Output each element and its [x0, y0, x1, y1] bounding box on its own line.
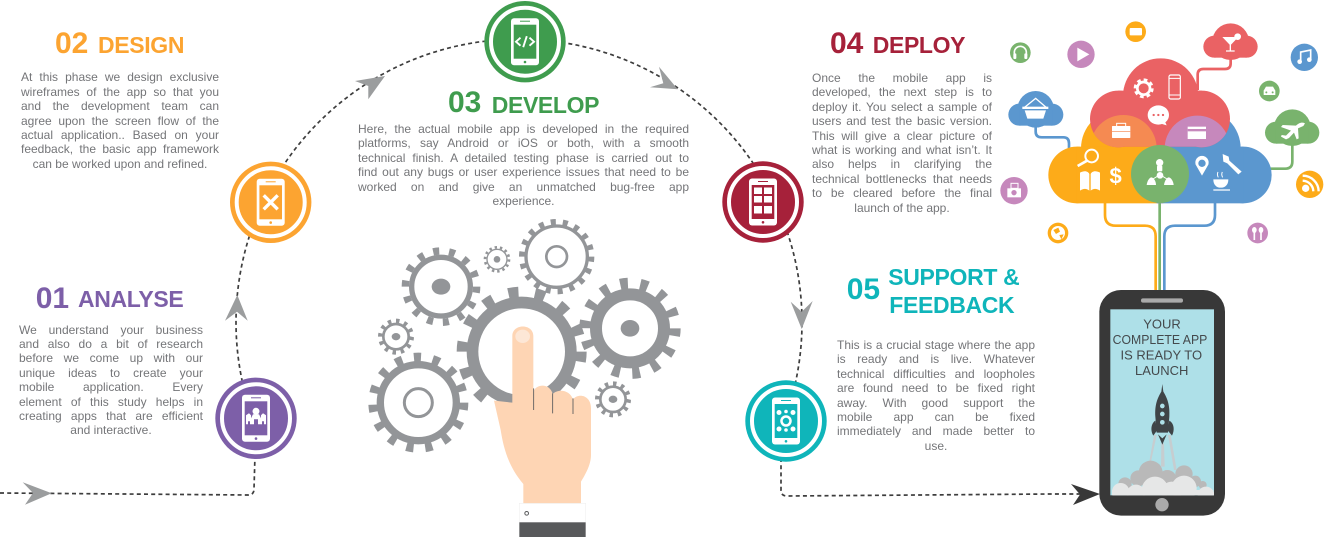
text: develop description: technical finish. A detailed testing phase is carried out to: [358, 151, 689, 165]
text: analyse description: element of this study helps in: [19, 395, 203, 409]
text: design description: At this phase we design exclusive: [21, 70, 219, 84]
icon: support badge: [745, 380, 827, 462]
icon: cutlery: [1247, 223, 1268, 243]
text: develop description: experience.: [492, 194, 555, 208]
launch phone: [1099, 290, 1225, 516]
icon: rss: [1296, 171, 1323, 198]
panel: step 05 support and feedback: FEEDBACK: [889, 292, 1014, 318]
text: develop description: platforms, say Android or iOS or both, with a smooth: [358, 136, 689, 150]
text: design description: [21, 70, 219, 171]
cloud network illustration: [1000, 21, 1323, 291]
panel: step 04 deploy: [812, 27, 992, 215]
icon: airplane cloud: [1265, 109, 1319, 146]
green centre: [1131, 145, 1189, 203]
screen caption: YOUR: [1143, 316, 1181, 331]
icon: analyse badge: [215, 378, 297, 459]
text: deploy description: technical bottlenecks that needs: [812, 172, 992, 186]
text: support description: are found need to be fixed right: [837, 381, 1035, 395]
gear: top: [522, 222, 591, 291]
smoke: [1112, 460, 1214, 496]
text: analyse description: and interactive.: [70, 423, 152, 437]
icon: develop badge: [484, 1, 566, 82]
icon: cocktail cloud: [1203, 23, 1258, 60]
panel: step 05 support and feedback: 05: [847, 273, 880, 306]
screen caption: IS READY TO: [1121, 347, 1202, 362]
gear: top left: [405, 251, 477, 322]
rocket: [1149, 384, 1177, 470]
panel: step 03 develop: [358, 86, 689, 208]
gear: small top: [485, 247, 509, 271]
text: design description: actual application.. Based on your: [21, 128, 219, 142]
panel: step 01 analyse: 01: [36, 282, 69, 315]
text: analyse description: [19, 323, 203, 437]
text: analyse description: creating apps that are efficient: [19, 409, 203, 423]
phone screen: [1110, 309, 1214, 495]
panel: step 02 design: [21, 27, 219, 171]
gear: right: [585, 284, 675, 373]
text: design description: agree upon the screen flow of the: [21, 114, 219, 128]
panel: step 05 support and feedback: SUPPORT &: [888, 264, 1019, 290]
text: deploy description: Once the mobile app is: [812, 71, 992, 85]
gear: centre: [462, 292, 581, 411]
text: deploy description: users and test the basic version.: [812, 114, 992, 128]
text: support description: mobile app can be fixed: [837, 410, 1035, 424]
hand: [494, 326, 591, 537]
text: analyse description: before we come up with our: [19, 351, 203, 365]
text: deploy description: developed, the next step is to: [812, 85, 992, 99]
text: design description: wireframes of the app so that you: [21, 85, 219, 99]
text: support description: This is a crucial stage where the app: [837, 338, 1035, 352]
text: deploy description: [812, 71, 992, 215]
panel: step 05 support and feedback: [837, 264, 1035, 453]
panel: step 04 deploy: 04: [830, 27, 863, 60]
icon: globe: [1048, 223, 1068, 243]
screen caption: COMPLETE APP: [1113, 332, 1207, 347]
text: support description: technical difficulties and loopholes: [837, 367, 1035, 381]
panel: step 03 develop: DEVELOP: [492, 92, 599, 118]
panel: step 01 analyse: ANALYSE: [78, 286, 183, 312]
text: analyse description: unique ideas to create your: [19, 366, 203, 380]
gear: small left: [380, 321, 412, 352]
text: develop description: worked on and give an unmatched bug-free app: [358, 180, 689, 194]
icon: deploy badge: [722, 161, 804, 243]
icon: design badge: [230, 162, 311, 243]
text: develop description: find out any bugs or user experience issues that need to be: [358, 165, 689, 179]
phone body: [1099, 290, 1225, 516]
text: analyse description: mobile application. Every: [19, 380, 203, 394]
icon: headphones: [1010, 42, 1031, 63]
gear: small right: [597, 384, 629, 415]
icon: tablet: [1125, 21, 1146, 42]
red cloud lobe: [1090, 58, 1230, 147]
icon: play: [1067, 41, 1095, 68]
text: deploy description: what is working and what isn’t. It: [812, 143, 992, 157]
panel: step 01 analyse: [19, 282, 203, 437]
text: design description: can be worked upon and refined.: [33, 157, 207, 171]
text: design description: feedback, the basic app framework: [21, 142, 219, 156]
text: support description: is ready and is live. Whatever: [837, 352, 1035, 366]
icon: car: [1259, 81, 1280, 101]
panel: step 03 develop: 03: [448, 86, 481, 119]
overlaps: [1094, 115, 1226, 148]
text: deploy description: also helps in clarifying the: [812, 157, 992, 171]
screen caption: [1113, 316, 1207, 378]
connectors: [1036, 57, 1292, 291]
text: deploy description: to be cleared before the final: [812, 186, 992, 200]
cloud glyphs: $: [1110, 164, 1122, 189]
gears and pointing hand: [373, 222, 675, 537]
panel: step 04 deploy: DEPLOY: [873, 32, 965, 58]
text: analyse description: and also do a bit of research: [19, 337, 203, 351]
cloud glyphs: [1078, 75, 1242, 191]
screen caption: LAUNCH: [1135, 363, 1188, 378]
icon: basket cloud: [1008, 91, 1063, 128]
panel: step 02 design: 02: [55, 27, 88, 60]
text: design description: and the development team can: [21, 99, 219, 113]
icon: music: [1291, 44, 1318, 71]
text: develop description: Here, the actual mobile app is developed in the required: [358, 122, 689, 136]
text: develop description: [358, 122, 689, 208]
panel: step 02 design: DESIGN: [98, 32, 184, 58]
text: deploy description: This will give a clear picture of: [812, 129, 992, 143]
text: support description: away. With good support the: [837, 396, 1035, 410]
text: support description: [837, 338, 1035, 453]
text: deploy description: deploy it. You select a sample of: [812, 100, 992, 114]
blue cloud lobe: [1157, 109, 1272, 203]
gear: bottom left: [373, 358, 463, 448]
icon: camera: [1000, 177, 1028, 204]
yellow cloud lobe: [1048, 109, 1163, 203]
text: deploy description: launch of the app.: [854, 201, 950, 215]
text: analyse description: We understand your business: [19, 323, 203, 337]
text: support description: use.: [925, 439, 947, 453]
text: support description: immediately and made better to: [837, 424, 1035, 438]
